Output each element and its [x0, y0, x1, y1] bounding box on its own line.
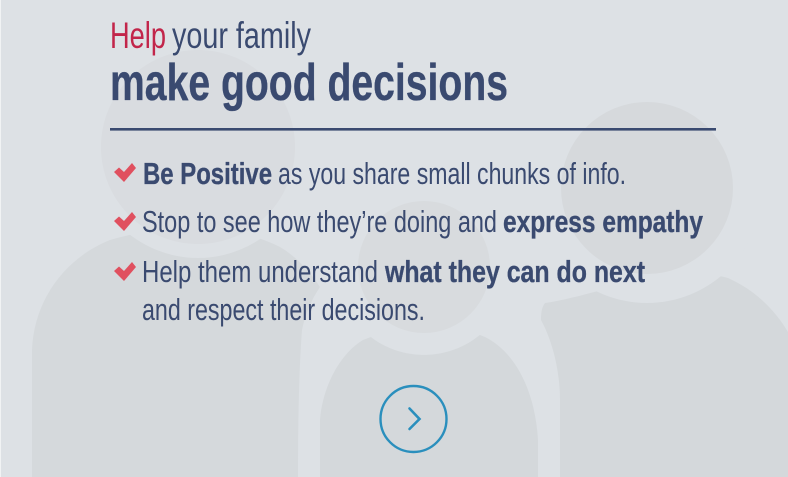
bullet 2: express empathy: [503, 204, 704, 239]
centre person silhouette: [320, 179, 538, 477]
title line 2: make good decisions: [110, 54, 508, 112]
next button: [380, 386, 446, 452]
title line 1: your family: [172, 15, 311, 56]
bullet list: [114, 156, 704, 327]
icon: check mark: [114, 163, 136, 182]
title line 1: Help: [110, 15, 166, 56]
title divider: [110, 128, 716, 131]
bullet 3: Help them understand: [142, 254, 378, 289]
bullet 3: and respect their decisions.: [142, 292, 425, 327]
icon: check mark: [114, 212, 136, 231]
right person silhouette: [532, 73, 788, 477]
bullet 2: Stop to see how they’re doing and: [142, 204, 497, 239]
bullet 3: what they can do next: [384, 254, 645, 289]
bullet 1: as you share small chunks of info.: [278, 156, 626, 191]
bullet 1: [114, 156, 626, 191]
bullet 1: Be Positive: [143, 156, 272, 191]
title line 1: [110, 15, 311, 56]
icon: check mark: [114, 262, 136, 281]
left person silhouette: [32, 36, 320, 477]
title: [110, 15, 508, 112]
icon: chevron arrow: [410, 408, 420, 429]
bullet 3: [114, 254, 645, 327]
